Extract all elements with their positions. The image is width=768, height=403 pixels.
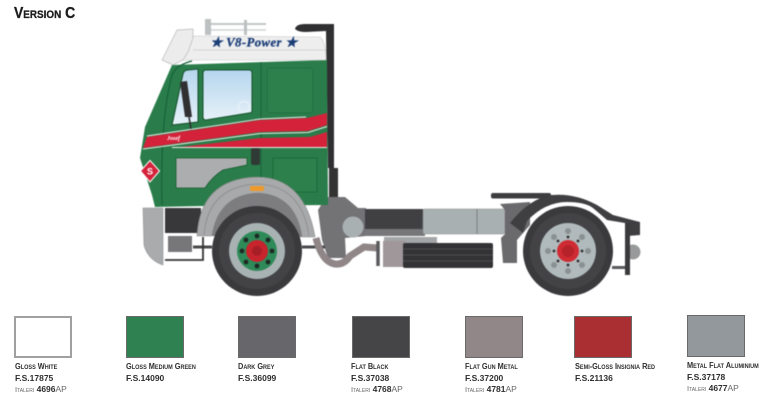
red stripes	[143, 113, 327, 148]
grey side panel	[176, 158, 247, 188]
label: dark grey: Dark Grey	[238, 362, 274, 371]
front wheel	[212, 206, 302, 296]
label: dark grey	[238, 362, 276, 383]
fuel tank	[423, 209, 505, 234]
label: gloss medium green: Gloss Medium Green	[126, 362, 196, 371]
swatch: gloss medium green	[126, 316, 184, 358]
label: flat gun metal: Flat Gun Metal	[465, 362, 518, 371]
label: metal flat aluminium	[687, 361, 759, 393]
mirror	[180, 81, 192, 117]
exhaust stack	[295, 24, 338, 197]
label: gloss white: F.S.17875	[15, 373, 53, 383]
swatch: semi-gloss insignia red	[574, 316, 632, 358]
label: gloss white: Italeri 4696AP	[15, 384, 67, 394]
roof rack horns	[205, 19, 266, 35]
label: flat black: F.S.37038	[351, 373, 389, 383]
label: flat gun metal: F.S.37200	[465, 373, 503, 383]
battery box	[403, 243, 493, 268]
side window small	[172, 69, 198, 125]
cab body: Josef	[166, 136, 181, 142]
front diamond emblem: S	[147, 166, 153, 176]
label: semi-gloss insignia red: Semi-Gloss Insignia Red	[575, 362, 655, 371]
label: flat black: Italeri 4768AP	[351, 384, 403, 394]
front diamond emblem	[140, 160, 160, 182]
label: flat black	[351, 362, 403, 394]
label: flat black: Flat Black	[351, 362, 389, 371]
mercedes star	[238, 102, 250, 112]
label: metal flat aluminium: Italeri 4677AP	[687, 383, 739, 393]
indicator	[250, 186, 264, 191]
title: Version C	[14, 5, 75, 22]
main window	[203, 70, 252, 120]
chassis	[193, 197, 437, 267]
label: gloss medium green: F.S.14090	[126, 373, 164, 383]
door handle	[251, 148, 260, 165]
front bumper and step	[143, 208, 203, 265]
label: metal flat aluminium: Metal Flat Aluminium	[687, 361, 759, 370]
cab body	[140, 19, 328, 207]
label: metal flat aluminium: F.S.37178	[687, 372, 725, 382]
label: flat gun metal: Italeri 4781AP	[465, 384, 517, 394]
rear wheel	[523, 206, 613, 296]
label: semi-gloss insignia red: F.S.21136	[575, 373, 613, 383]
exhaust pipe	[316, 238, 378, 264]
swatch: flat gun metal	[465, 316, 523, 358]
sun visor	[162, 29, 193, 65]
label: semi-gloss insignia red	[575, 362, 655, 383]
swatch: flat black	[352, 316, 410, 358]
swatch: gloss white	[14, 316, 72, 358]
label: flat gun metal	[465, 362, 518, 394]
swatch: metal flat aluminium	[687, 315, 745, 357]
swatch: dark grey	[238, 316, 296, 358]
front wheel arch	[197, 177, 315, 237]
label: gloss white	[15, 362, 67, 394]
rear mudguard and fifth wheel	[491, 193, 640, 275]
label: gloss medium green	[126, 362, 196, 383]
label: dark grey: F.S.36099	[238, 373, 276, 383]
V8-Power lettering: ★ V8-Power ★	[211, 36, 299, 50]
label: gloss white: Gloss White	[15, 362, 57, 371]
